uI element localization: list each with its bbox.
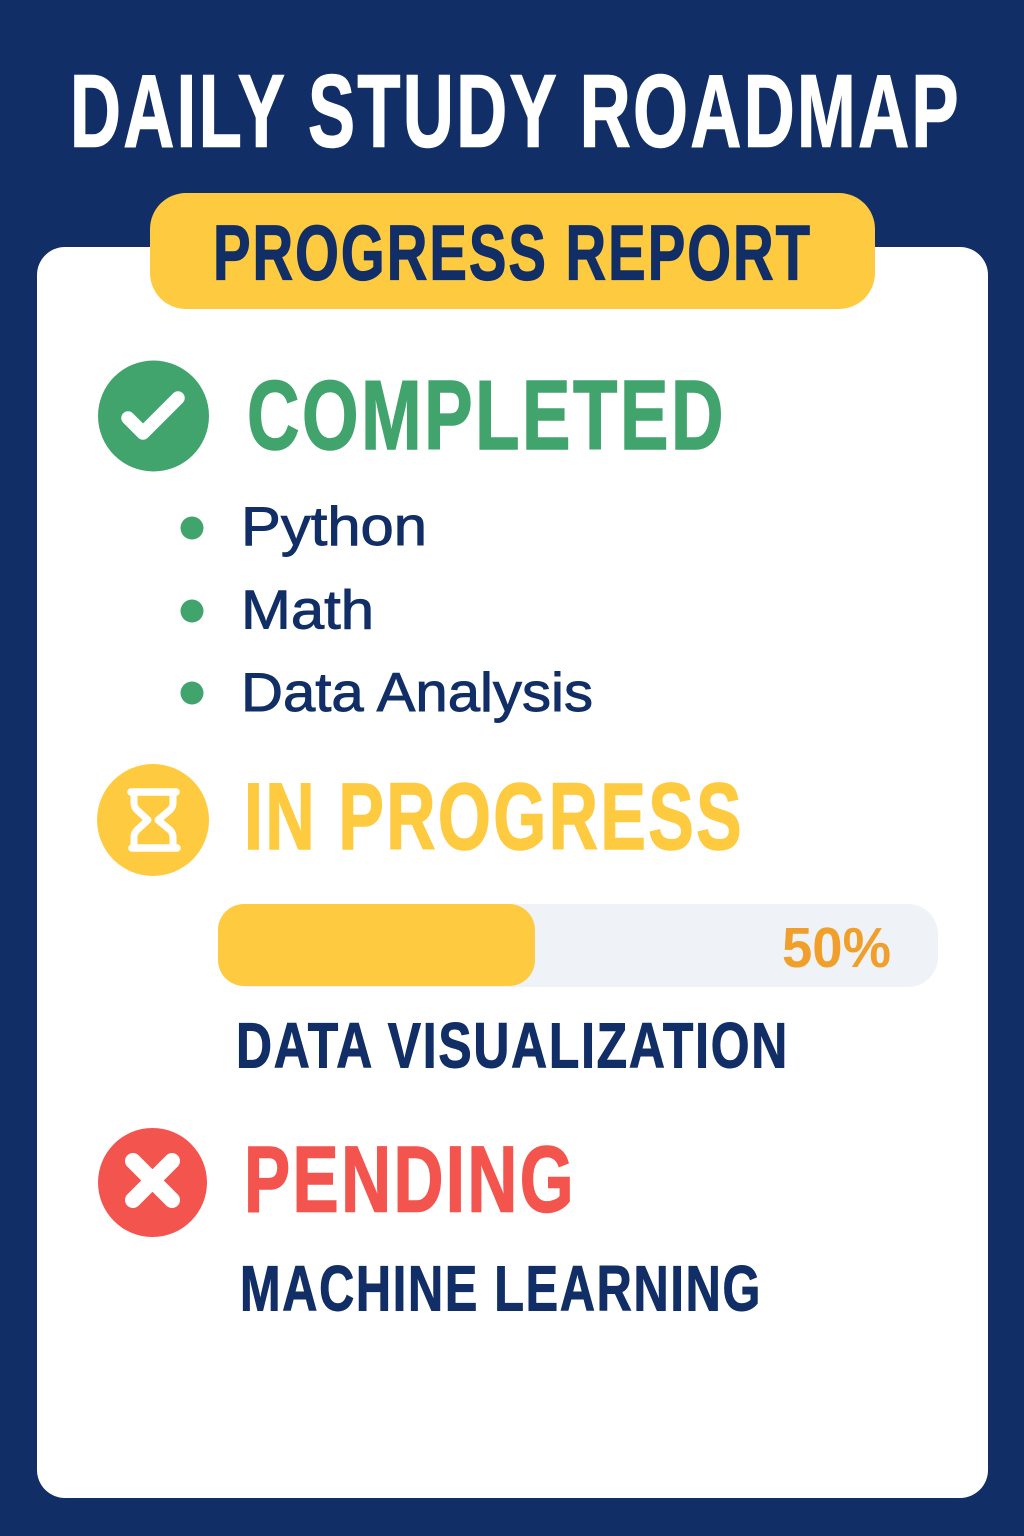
heading: pending: PENDING xyxy=(244,1126,576,1232)
badge: progress report xyxy=(150,193,875,309)
heading: completed: COMPLETED xyxy=(247,360,726,470)
badge: progress report: PROGRESS REPORT xyxy=(213,208,812,296)
list: completed items xyxy=(180,495,593,723)
list item: python xyxy=(180,495,427,557)
progress bar: 50% xyxy=(218,904,938,987)
heading: in progress: IN PROGRESS xyxy=(244,764,744,870)
panel: report card xyxy=(37,193,988,1498)
icon: yellow hourglass circle xyxy=(97,764,209,876)
list item: math xyxy=(180,578,374,640)
list item: math: Math xyxy=(241,578,374,640)
label: machine learning: MACHINE LEARNING xyxy=(240,1252,762,1324)
list item: python: Python xyxy=(241,495,427,557)
icon: green check circle xyxy=(98,360,209,472)
icon: red cross circle xyxy=(98,1128,207,1237)
label: data visualization: DATA VISUALIZATION xyxy=(236,1010,789,1082)
progress value: 50% xyxy=(782,916,891,980)
list item: data analysis: Data Analysis xyxy=(241,661,593,723)
